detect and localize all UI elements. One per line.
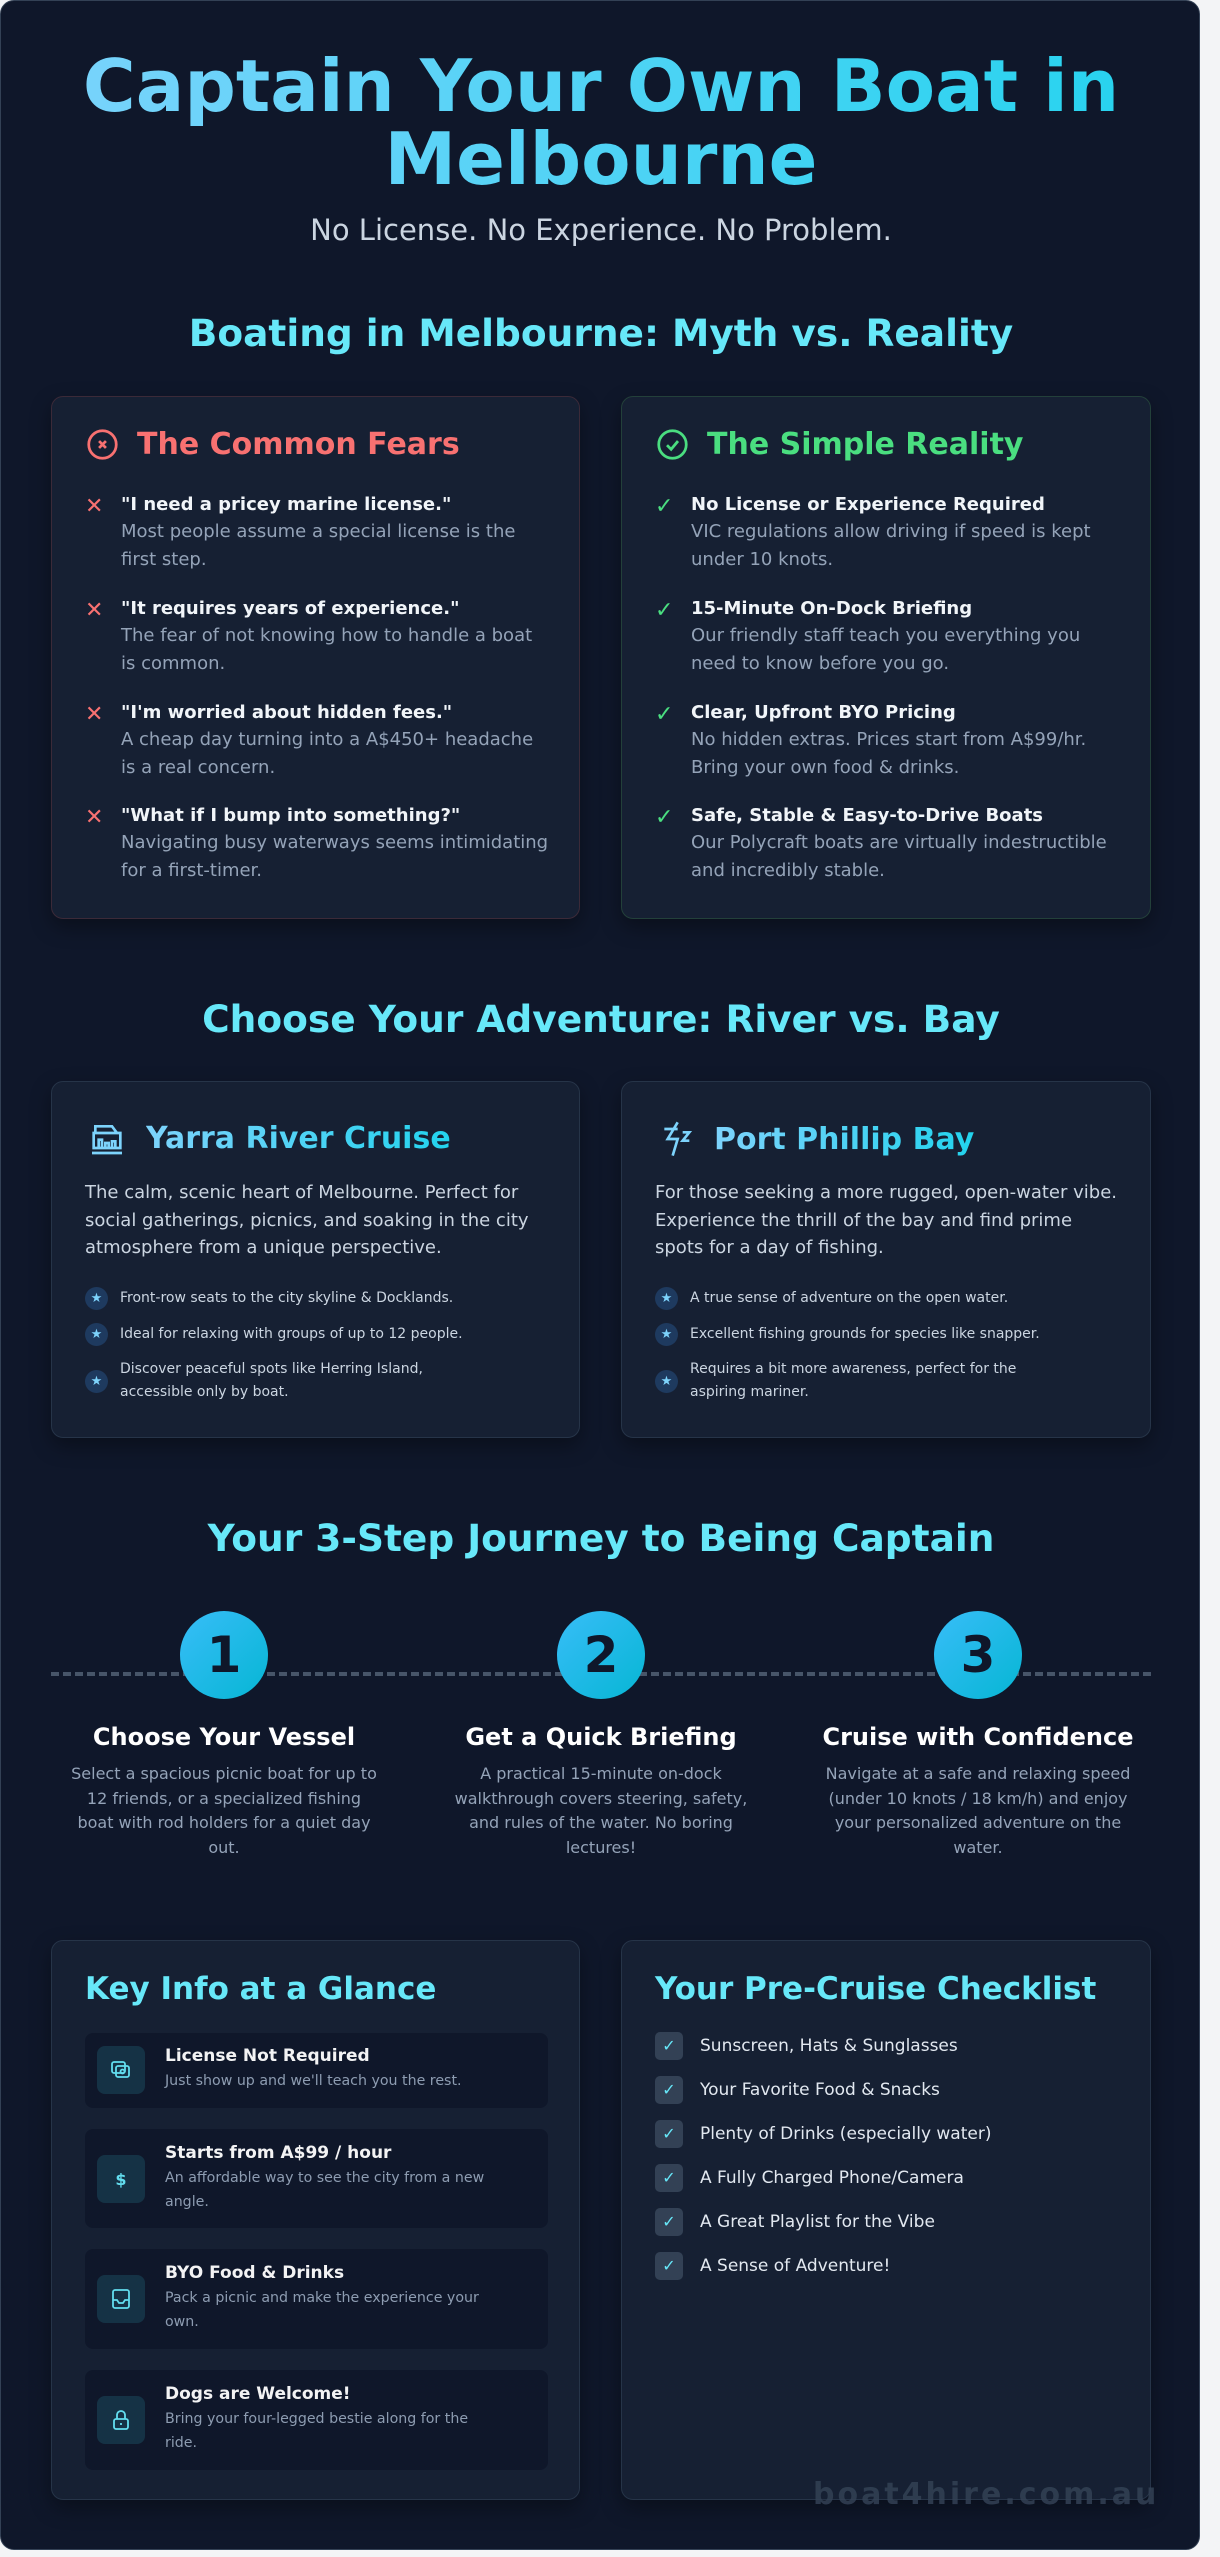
step 2 text: A practical 15-minute on-dock (480, 1764, 722, 1783)
check 3: Plenty of Drinks (especially water) (700, 2124, 991, 2144)
panel: key info (51, 1940, 580, 2500)
info: price: angle. (165, 2194, 209, 2210)
step 2 text (455, 1764, 747, 1856)
fear 1: Most people assume a special license is the first step. (121, 521, 515, 570)
reality 1: ✓ (655, 494, 673, 519)
check 4: A Fully Charged Phone/Camera (700, 2168, 964, 2188)
check 6: A Sense of Adventure! (700, 2256, 890, 2276)
info: price: Starts from A$99 / hour (165, 2143, 391, 2163)
fear 1: ✕ (85, 494, 103, 519)
fear 3 (85, 702, 533, 778)
yarra heading: Yarra River Cruise (146, 1120, 451, 1156)
fear 1: "I need a pricey marine license." (121, 494, 451, 515)
info: price (85, 2129, 548, 2228)
reality heading: The Simple Reality (707, 427, 1023, 462)
circle 3 (934, 1611, 1022, 1699)
yarra bullet 3: accessible only by boat. (120, 1384, 289, 1400)
circle 1: 1 (207, 1626, 241, 1684)
fear 4: Navigating busy waterways seems intimidating for a first-timer. (121, 832, 548, 881)
fears heading: The Common Fears (137, 427, 460, 462)
fear 3: "I'm worried about hidden fees." (121, 702, 452, 723)
info: dogs: Dogs are Welcome! (165, 2384, 351, 2404)
fear 2: The fear of not knowing how to handle a boat is common. (121, 625, 532, 674)
reality 2: Our friendly staff teach you everything you need to know before you go. (691, 625, 1080, 674)
bay bullet 3: Requires a bit more awareness, perfect for the (690, 1361, 1016, 1377)
reality 4: Our Polycraft boats are virtually indestructible and incredibly stable. (691, 832, 1107, 881)
yarra bullet 2 (85, 1323, 463, 1346)
info: license: Just show up and we'll teach you the rest. (165, 2073, 462, 2089)
watermark: boat4hire.com.au (813, 2477, 1159, 2512)
reality 1: No License or Experience Required (691, 494, 1045, 515)
check 6 (655, 2252, 890, 2280)
check 2: Your Favorite Food & Snacks (700, 2080, 940, 2100)
info: byo: own. (165, 2314, 199, 2330)
check 6: ✓ (662, 2256, 676, 2275)
panel: port phillip bay (621, 1081, 1151, 1438)
panel: yarra river (51, 1081, 580, 1438)
bay bullet 1: ★ (661, 1291, 672, 1306)
yarra bullet 1: ★ (91, 1291, 102, 1306)
step 1 text: boat with rod holders for a quiet day (77, 1813, 371, 1832)
reality 1 (655, 494, 1091, 570)
check 3: ✓ (662, 2124, 676, 2143)
yarra bullet 3 (85, 1361, 423, 1400)
check 4: ✓ (662, 2168, 676, 2187)
fear 2 (85, 598, 532, 674)
check 1: ✓ (662, 2036, 676, 2055)
fear 4 (85, 805, 548, 881)
yarra bullet 2: Ideal for relaxing with groups of up to 12 people. (120, 1326, 463, 1342)
info: dogs: ride. (165, 2435, 197, 2451)
panel: checklist (621, 1940, 1151, 2500)
title: Captain Your Own Boat in (83, 44, 1119, 128)
check 1 (655, 2032, 958, 2060)
fear 4: ✕ (85, 805, 103, 830)
bay bullet 3 (655, 1361, 1016, 1400)
panel: common fears (51, 396, 580, 919)
bay bullet 2 (655, 1323, 1040, 1346)
info: dogs: Bring your four-legged bestie along for the (165, 2411, 468, 2427)
yarra bullet 3: ★ (91, 1374, 102, 1388)
circle 3: 3 (961, 1626, 995, 1684)
info: price: $ (115, 2170, 127, 2188)
step 2 title: Get a Quick Briefing (465, 1723, 737, 1751)
info: byo (85, 2249, 548, 2349)
check 5 (655, 2208, 935, 2236)
yarra bullet 1 (85, 1287, 453, 1310)
heading: 3-step journey: Your 3-Step Journey to Being Captain (208, 1516, 994, 1560)
check 2 (655, 2076, 940, 2104)
reality 2 (655, 598, 1080, 674)
reality 3 (655, 702, 1086, 778)
reality 4 (655, 805, 1107, 881)
title (1, 50, 1201, 196)
circle 2: 2 (584, 1626, 618, 1684)
reality 1: VIC regulations allow driving if speed is kept under 10 knots. (691, 521, 1091, 570)
bay bullet 1: A true sense of adventure on the open water. (690, 1290, 1008, 1306)
fear 4: "What if I bump into something?" (121, 805, 460, 826)
heading: river vs bay: Choose Your Adventure: River vs. Bay (202, 997, 1000, 1041)
step 3 text: (under 10 knots / 18 km/h) and enjoy (828, 1788, 1128, 1808)
yarra bullet 2: ★ (91, 1327, 102, 1342)
yarra bullet 1: Front-row seats to the city skyline & Docklands. (120, 1290, 453, 1306)
step 1 text: out. (208, 1838, 240, 1856)
info: byo: Pack a picnic and make the experience your (165, 2290, 479, 2306)
circle 2 (557, 1611, 645, 1699)
fear 2: "It requires years of experience." (121, 598, 459, 619)
step 1 (71, 1611, 377, 1856)
fear 2: ✕ (85, 598, 103, 623)
reality 3: ✓ (655, 702, 673, 727)
reality 3: No hidden extras. Prices start from A$99/hr. Bring your own food & drinks. (691, 729, 1086, 778)
fear 3: A cheap day turning into a A$450+ headache is a real concern. (121, 729, 533, 778)
bay description: For those seeking a more rugged, open-water vibe. Experience the thrill of the bay and find prime spots for a day of fishing. (655, 1182, 1117, 1258)
reality 2: 15-Minute On-Dock Briefing (691, 598, 972, 619)
subtitle: No License. No Experience. No Problem. (310, 213, 892, 247)
step 3 text: your personalized adventure on the (835, 1813, 1121, 1832)
step 2 text: and rules of the water. No boring (469, 1813, 733, 1832)
step 3 text: Navigate at a safe and relaxing speed (826, 1764, 1130, 1783)
step 3 (822, 1611, 1134, 1856)
reality 3: Clear, Upfront BYO Pricing (691, 702, 956, 723)
panel: simple reality (621, 396, 1151, 919)
yarra bullet 3: Discover peaceful spots like Herring Island, (120, 1361, 423, 1377)
step 1 text: 12 friends, or a specialized fishing (87, 1788, 361, 1808)
step 1 text: Select a spacious picnic boat for up to (71, 1764, 377, 1783)
info: dogs (85, 2370, 548, 2470)
circle 1 (180, 1611, 268, 1699)
bay bullet 2: Excellent fishing grounds for species like snapper. (690, 1326, 1040, 1342)
fear 3: ✕ (85, 702, 103, 727)
step 2 (455, 1611, 747, 1856)
check 3 (655, 2120, 991, 2148)
check 4 (655, 2164, 964, 2192)
check 5: ✓ (662, 2212, 676, 2231)
info: license: License Not Required (165, 2046, 370, 2066)
step 2 text: lectures! (566, 1838, 636, 1856)
step 2 text: walkthrough covers steering, safety, (455, 1788, 747, 1808)
bay bullet 3: aspiring mariner. (690, 1384, 809, 1400)
fear 1 (85, 494, 515, 570)
bay bullet 2: ★ (661, 1327, 672, 1342)
yarra description: The calm, scenic heart of Melbourne. Perfect for social gatherings, picnics, and soaking in the city atmosphere from a unique perspective. (85, 1182, 529, 1258)
bay heading: Port Phillip Bay (714, 1122, 974, 1156)
info: price: An affordable way to see the city from a new (165, 2170, 484, 2186)
bay bullet 1 (655, 1287, 1008, 1310)
heading: myth vs reality: Boating in Melbourne: Myth vs. Reality (189, 311, 1013, 355)
check 5: A Great Playlist for the Vibe (700, 2212, 935, 2232)
step 3 text: water. (953, 1838, 1003, 1856)
step 1 text (71, 1764, 377, 1856)
reality 4: Safe, Stable & Easy-to-Drive Boats (691, 805, 1043, 826)
reality 4: ✓ (655, 805, 673, 830)
info: license (85, 2033, 548, 2108)
check 2: ✓ (662, 2080, 676, 2099)
step 1 title: Choose Your Vessel (93, 1723, 355, 1751)
step 3 text (826, 1764, 1130, 1856)
checklist heading: Your Pre-Cruise Checklist (655, 1971, 1096, 2007)
info: byo: BYO Food & Drinks (165, 2263, 344, 2283)
bay bullet 3: ★ (661, 1374, 672, 1388)
title: Melbourne (384, 117, 818, 201)
step 3 title: Cruise with Confidence (822, 1723, 1134, 1751)
check 1: Sunscreen, Hats & Sunglasses (700, 2036, 958, 2056)
key info heading: Key Info at a Glance (85, 1971, 436, 2007)
reality 2: ✓ (655, 598, 673, 623)
